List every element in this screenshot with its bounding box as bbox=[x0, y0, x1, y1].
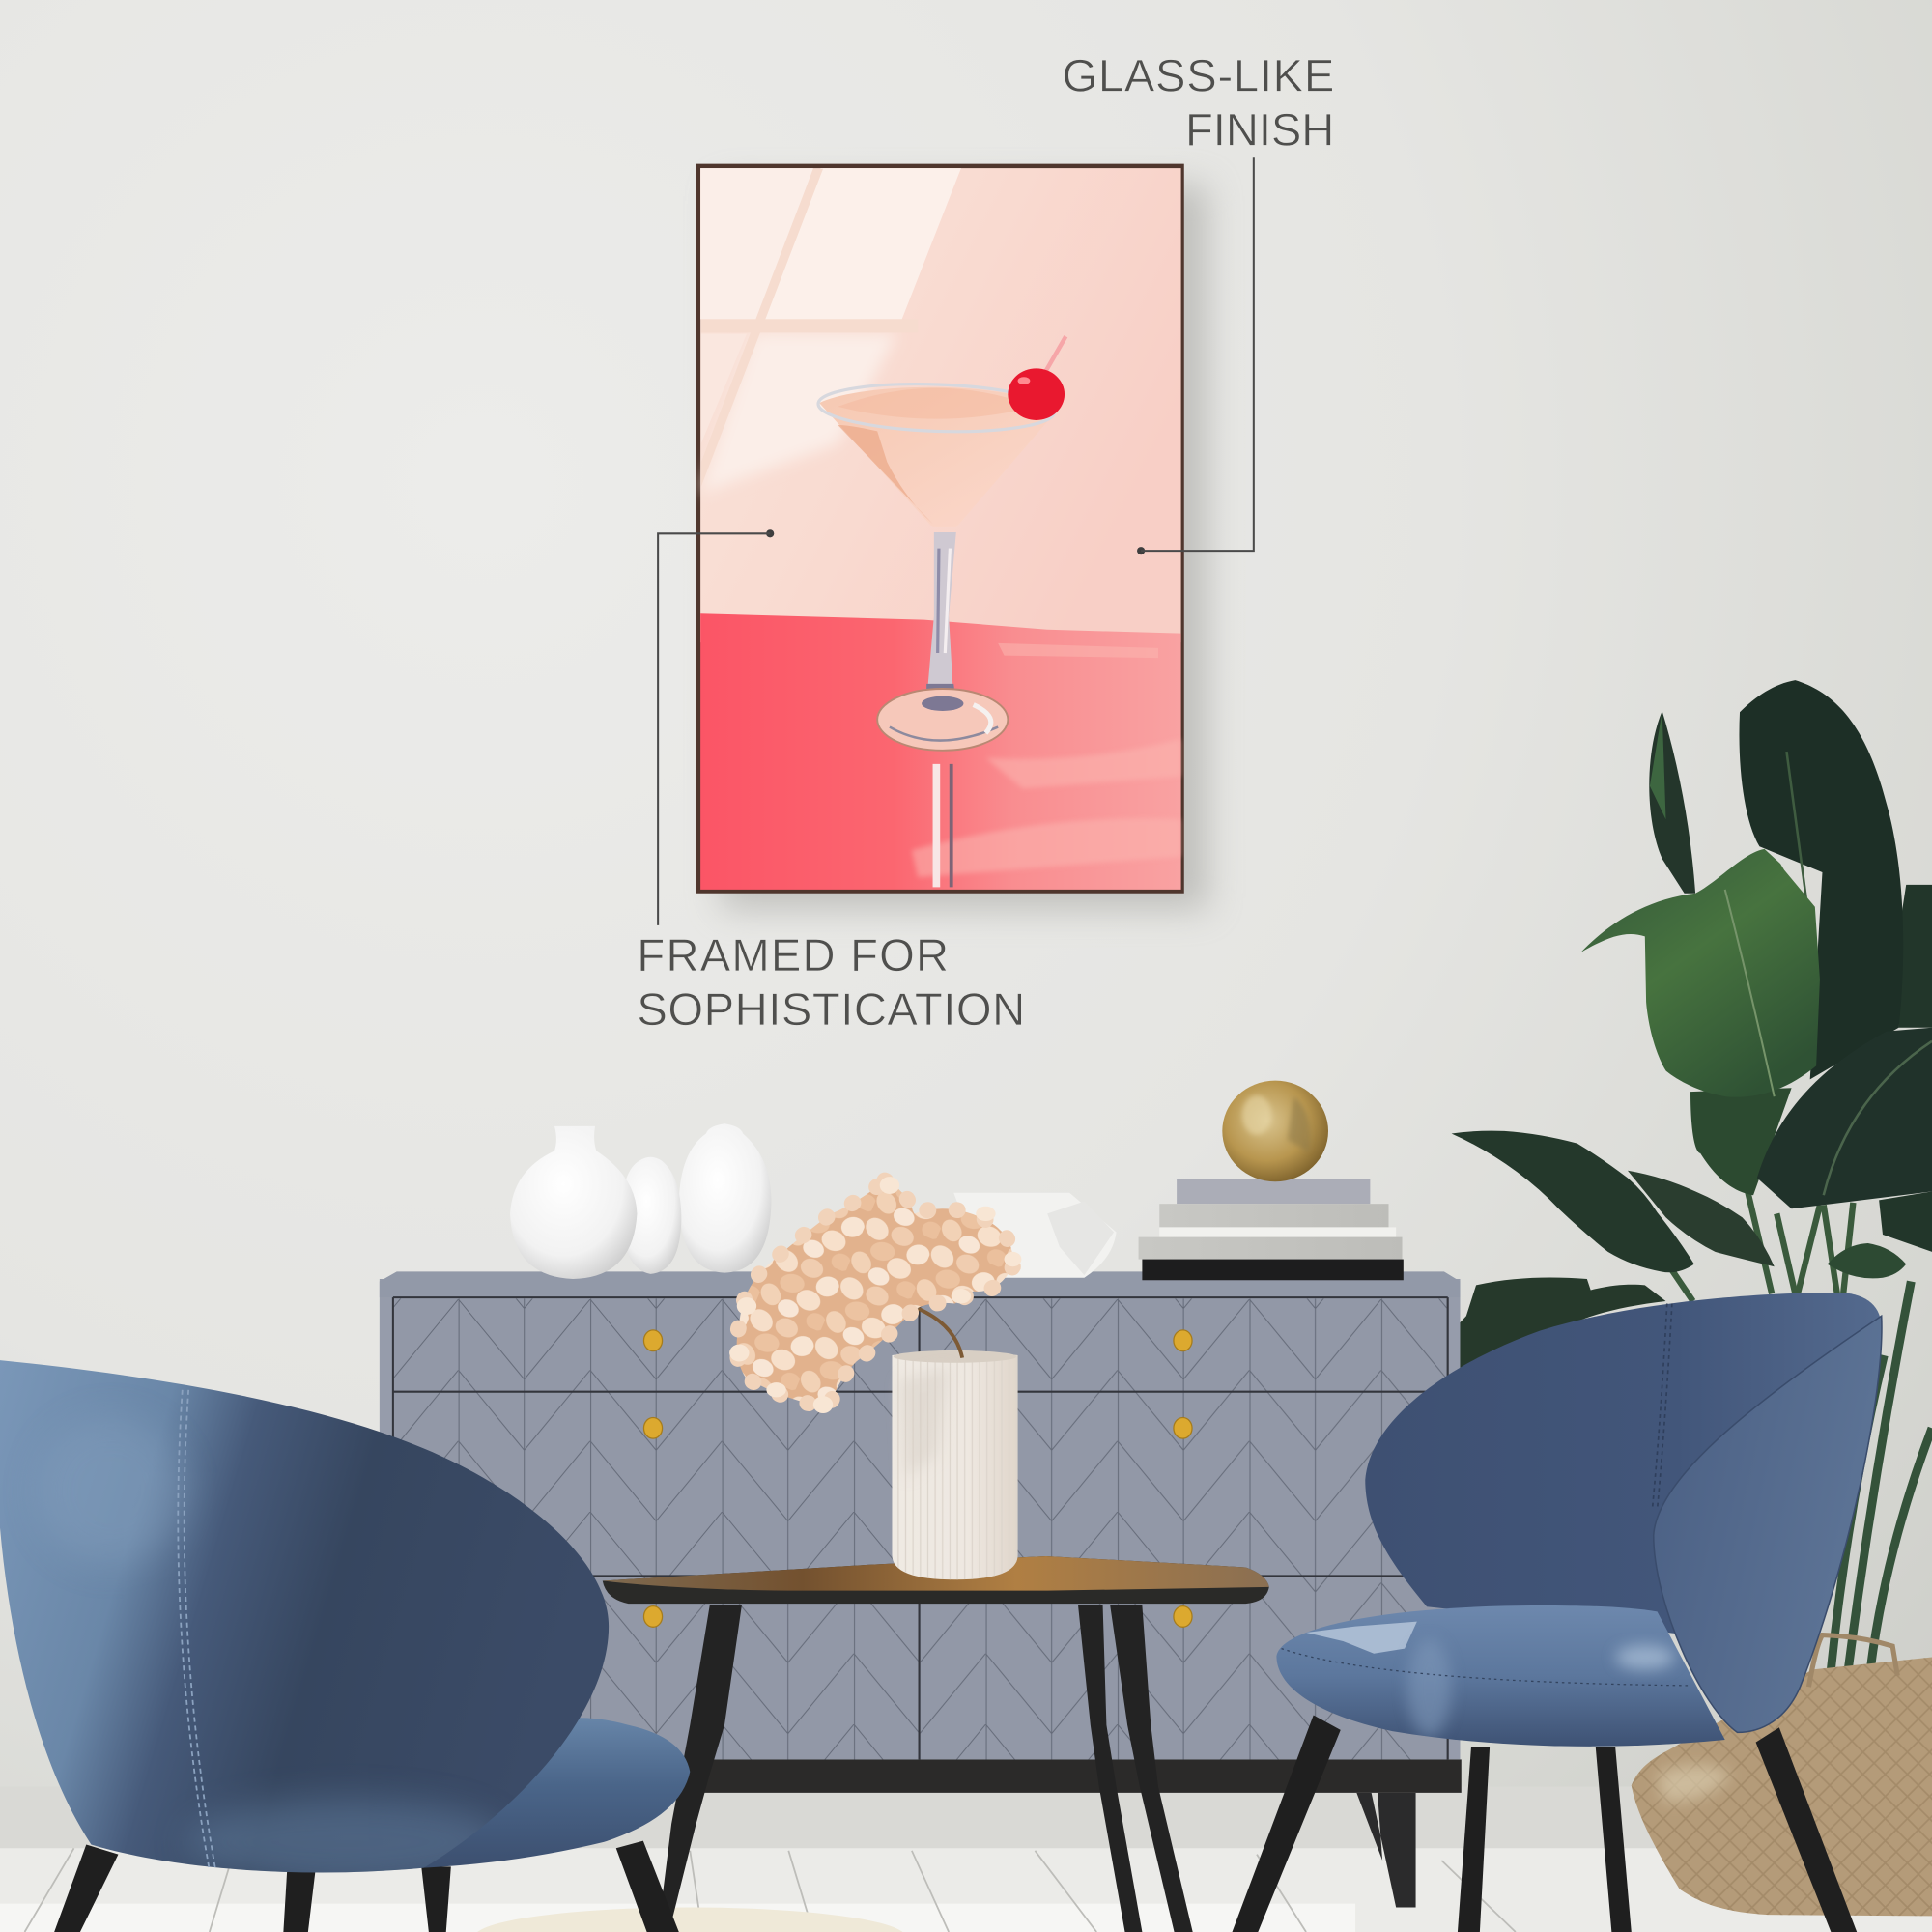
flower mass bbox=[737, 1180, 1013, 1407]
callout text: glass-like finish bbox=[1062, 50, 1334, 156]
left chair seam bbox=[178, 1390, 215, 1870]
cabinet plinth bbox=[699, 1759, 1462, 1793]
cabinet body bbox=[380, 1279, 1460, 1759]
callout text: glass-like finish: FINISH bbox=[1185, 105, 1334, 156]
right chair seat bbox=[1276, 1605, 1725, 1747]
right chair legs bbox=[1233, 1716, 1857, 1932]
gold knobs bbox=[643, 1330, 1192, 1627]
faceted white bowl bbox=[953, 1193, 1117, 1278]
frame bbox=[696, 164, 1184, 894]
painting upper wall bbox=[700, 168, 1181, 642]
callout text: framed for sophistication: SOPHISTICATION bbox=[637, 984, 1025, 1036]
stem reflection bbox=[933, 764, 939, 887]
drawer seams bbox=[393, 1297, 1448, 1759]
gold sphere bbox=[1222, 1081, 1328, 1181]
sideboard cabinet bbox=[380, 1271, 1462, 1907]
floor planks bbox=[0, 1848, 1932, 1932]
glass bowl bbox=[819, 387, 1057, 527]
glass rim bbox=[817, 381, 1056, 436]
flower highlights bbox=[729, 1177, 1021, 1413]
ribbed white vase bbox=[892, 1350, 1018, 1579]
potted plant bbox=[1356, 680, 1932, 1669]
chevron drawer fronts bbox=[393, 1298, 1448, 1759]
baseboard bbox=[0, 1786, 1932, 1855]
right chair seat sunlight bbox=[1306, 1622, 1674, 1737]
glass base bbox=[877, 689, 1008, 751]
cherry bbox=[1008, 368, 1065, 420]
side table bbox=[603, 1556, 1269, 1932]
plant stems bbox=[1669, 1100, 1853, 1301]
callout line: glass-like finish bbox=[1137, 157, 1254, 554]
dried hydrangea bouquet bbox=[729, 1177, 1021, 1413]
white ceramic vases bbox=[510, 1123, 771, 1279]
cherry pick bbox=[1042, 336, 1065, 377]
painting table highlights bbox=[912, 643, 1180, 877]
left chair legs bbox=[54, 1841, 679, 1932]
table legs bbox=[659, 1605, 1193, 1932]
callout text: glass-like finish: GLASS-LIKE bbox=[1062, 50, 1334, 101]
right chair backrest bbox=[1365, 1293, 1882, 1638]
right chair wing bbox=[1654, 1316, 1882, 1732]
cabinet legs bbox=[1356, 1793, 1416, 1907]
flower stem bbox=[918, 1309, 962, 1358]
left chair seat bbox=[424, 1718, 690, 1868]
woven basket bbox=[1632, 1635, 1932, 1916]
right chair seam bbox=[1652, 1303, 1672, 1509]
frame shadow bbox=[721, 185, 1208, 909]
left chair backrest bbox=[0, 1360, 609, 1886]
callout text: framed for sophistication: FRAMED FOR bbox=[637, 930, 949, 981]
painting window light reflection bbox=[700, 168, 961, 493]
right velvet chair bbox=[1233, 1293, 1882, 1932]
glass stem bbox=[926, 532, 956, 701]
painting table surface bbox=[700, 613, 1181, 890]
plant leaves bbox=[1899, 885, 1932, 1028]
cabinet top edge bbox=[380, 1271, 1460, 1297]
left chair sheen bbox=[37, 1417, 505, 1886]
left velvet chair bbox=[0, 1360, 690, 1932]
stack of books bbox=[1139, 1179, 1404, 1280]
martini glass bbox=[817, 336, 1065, 887]
callout line: framed for sophistication bbox=[658, 529, 774, 925]
callout text: framed for sophistication bbox=[637, 930, 1025, 1036]
framed artwork bbox=[696, 164, 1208, 909]
table top bbox=[603, 1556, 1269, 1604]
